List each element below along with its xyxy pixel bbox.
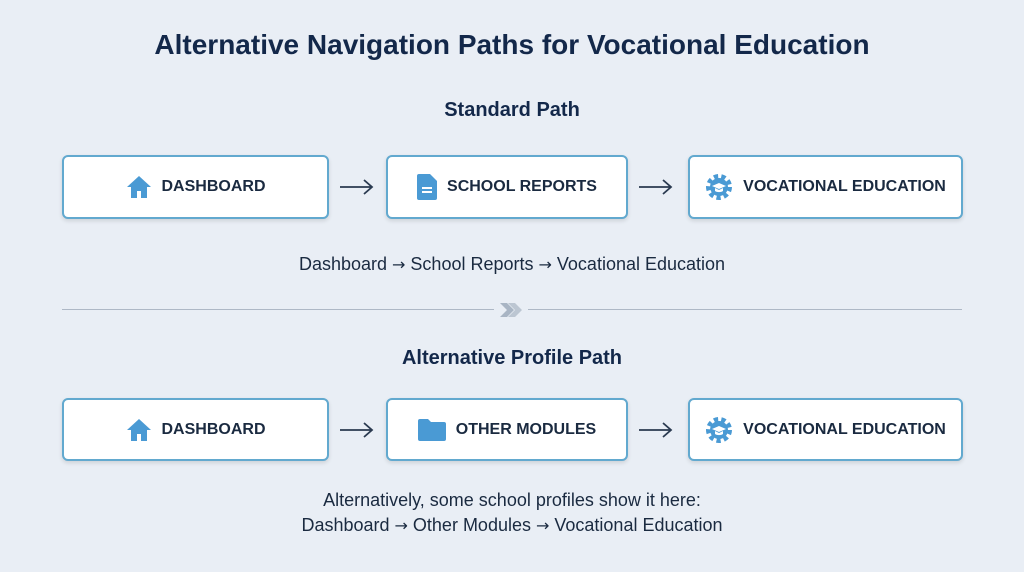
box: vocational education 2 — [688, 398, 963, 461]
box: vocational education 1 — [688, 155, 963, 219]
arrow 4 — [639, 422, 672, 438]
box: dashboard 1 — [62, 155, 329, 219]
box: other modules: OTHER MODULES — [456, 420, 596, 438]
box: other modules — [386, 398, 628, 461]
caption: standard path: Dashboard → School Reports → Vocational Education — [299, 254, 725, 274]
arrow 2 — [639, 179, 672, 195]
caption: alternative path: Alternatively, some school profiles show it here: — [323, 490, 701, 510]
box: vocational education 2: VOCATIONAL EDUCATION — [743, 420, 946, 438]
box: dashboard 2: DASHBOARD — [162, 420, 266, 438]
title: Alternative Navigation Paths for Vocational Education — [154, 29, 870, 60]
arrow 3 — [340, 422, 374, 438]
box: vocational education 1: VOCATIONAL EDUCATION — [743, 178, 946, 195]
box: school reports: SCHOOL REPORTS — [447, 178, 597, 195]
box: dashboard 1: DASHBOARD — [162, 178, 266, 195]
caption: alternative path — [301, 490, 723, 535]
arrow 1 — [340, 179, 374, 195]
heading: standard path: Standard Path — [444, 99, 580, 121]
heading: alternative path: Alternative Profile Path — [402, 347, 622, 369]
divider with chevron — [62, 303, 962, 317]
box: school reports — [386, 155, 628, 219]
caption: alternative path: Dashboard → Other Modules → Vocational Education — [301, 515, 723, 535]
box: dashboard 2 — [62, 398, 329, 461]
